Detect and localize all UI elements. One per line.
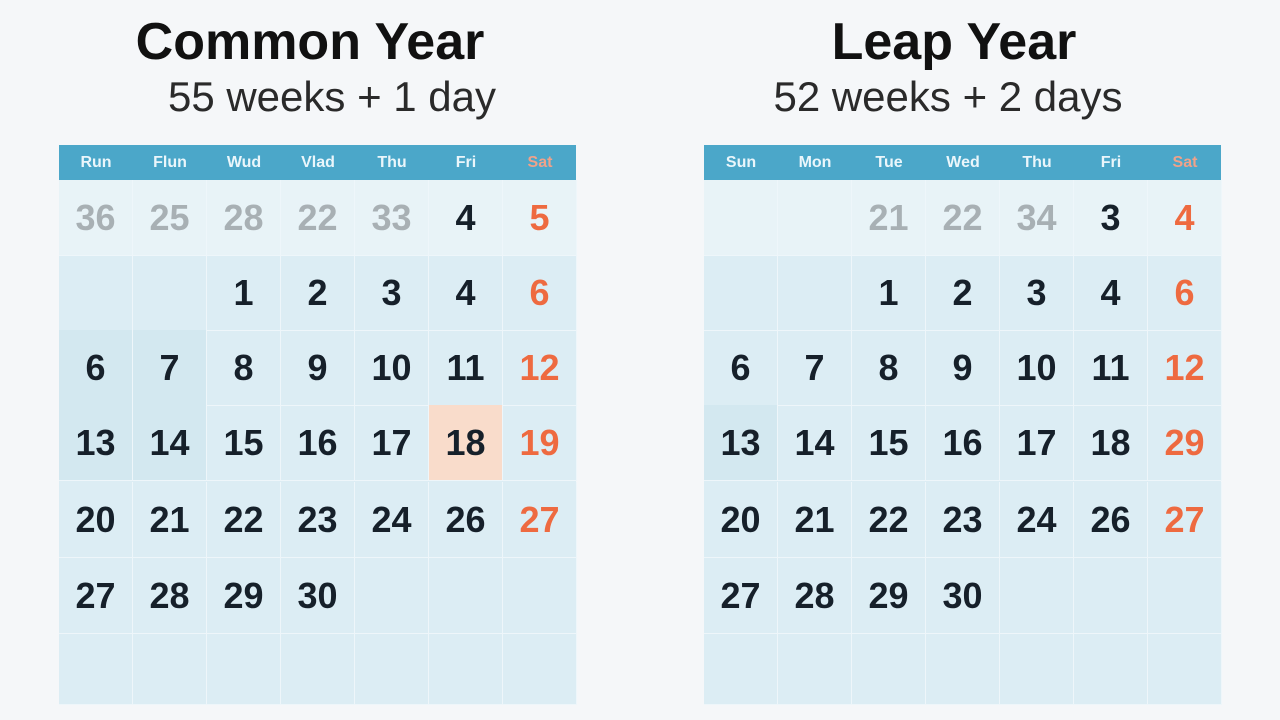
panel: common year calendar: 17 (371, 422, 412, 463)
panel: leap year calendar (704, 145, 1221, 705)
panel: common year calendar: 22 (297, 197, 338, 238)
panel: leap year calendar: 7 (804, 347, 825, 388)
panel: common year calendar: 5 (529, 197, 550, 238)
panel: leap year calendar: 22 (942, 197, 983, 238)
panel: common year calendar: 3 (381, 272, 402, 313)
panel: leap year calendar: 3 (1100, 197, 1121, 238)
panel: common year calendar (59, 145, 576, 705)
panel: common year calendar: 25 (149, 197, 190, 238)
panel: leap year calendar: 29 (1164, 422, 1205, 463)
panel: common year calendar: 7 (159, 347, 180, 388)
panel: leap year calendar: 24 (1016, 499, 1057, 540)
title: common year: Common Year (136, 13, 484, 71)
panel: leap year calendar: 3 (1026, 272, 1047, 313)
panel: common year calendar: 16 (297, 422, 338, 463)
panel: leap year calendar: 11 (1091, 347, 1130, 388)
panel: leap year calendar: 14 (794, 422, 835, 463)
panel: common year calendar: 13 (75, 422, 116, 463)
panel: leap year calendar: 1 (878, 272, 899, 313)
panel: common year calendar: 27 (75, 575, 116, 616)
panel: leap year calendar: 9 (952, 347, 973, 388)
panel: common year calendar: 18 (445, 422, 486, 463)
panel: common year calendar: 12 (519, 347, 560, 388)
panel: leap year calendar: 6 (1174, 272, 1195, 313)
panel: leap year calendar: 22 (868, 499, 909, 540)
panel: common year calendar: 8 (233, 347, 254, 388)
panel: leap year calendar: 21 (868, 197, 909, 238)
panel: common year calendar: 10 (371, 347, 412, 388)
panel: leap year calendar: 13 (720, 422, 761, 463)
panel: leap year calendar: Wed (946, 154, 980, 171)
panel: leap year calendar: 17 (1016, 422, 1057, 463)
panel: common year calendar: 27 (519, 499, 560, 540)
panel: leap year calendar: 15 (868, 422, 909, 463)
panel: common year calendar: 20 (75, 499, 116, 540)
panel: common year calendar: 2 (307, 272, 328, 313)
panel: common year calendar: 15 (223, 422, 264, 463)
panel: leap year calendar: 6 (730, 347, 751, 388)
panel: common year calendar: 24 (371, 499, 412, 540)
panel: leap year calendar: 18 (1090, 422, 1131, 463)
panel: common year calendar: 19 (519, 422, 560, 463)
panel: common year calendar: 1 (233, 272, 254, 313)
panel: leap year calendar: Fri (1101, 154, 1121, 171)
panel: common year calendar: 6 (85, 347, 106, 388)
panel: leap year calendar: 28 (794, 575, 835, 616)
panel: leap year calendar: Sun (726, 154, 756, 171)
panel: common year calendar: 9 (307, 347, 328, 388)
panel: leap year calendar: 2 (952, 272, 973, 313)
subtitle: leap year: 52 weeks + 2 days (773, 73, 1123, 120)
panel: leap year calendar: Mon (799, 154, 831, 171)
panel: leap year calendar: Tue (875, 154, 903, 171)
panel: common year calendar: Thu (377, 154, 407, 171)
panel: leap year calendar: 10 (1016, 347, 1057, 388)
panel: leap year calendar: 12 (1164, 347, 1205, 388)
panel: leap year calendar: 27 (1164, 499, 1205, 540)
panel: common year calendar: Run (80, 154, 112, 171)
panel: common year calendar: Vlad (301, 154, 335, 171)
subtitle: common year: 55 weeks + 1 day (168, 73, 496, 120)
panel: common year calendar: 4 (455, 197, 476, 238)
panel: common year calendar: 26 (445, 499, 486, 540)
panel: common year calendar: 33 (371, 197, 412, 238)
panel: leap year calendar: 34 (1016, 197, 1057, 238)
panel: common year calendar: 29 (223, 575, 264, 616)
title: leap year: Leap Year (832, 13, 1076, 71)
panel: leap year calendar: 29 (868, 575, 909, 616)
panel: common year calendar: 28 (149, 575, 190, 616)
panel: common year calendar: Wud (227, 154, 261, 171)
panel: leap year calendar: Thu (1022, 154, 1052, 171)
panel: leap year calendar: 8 (878, 347, 899, 388)
panel: common year calendar: 21 (149, 499, 190, 540)
panel: leap year calendar: 30 (942, 575, 983, 616)
panel: common year calendar: 30 (297, 575, 338, 616)
panel: leap year calendar: 26 (1090, 499, 1131, 540)
panel: common year calendar: 28 (223, 197, 264, 238)
panel: common year calendar: 14 (149, 422, 190, 463)
panel: leap year calendar: 27 (720, 575, 761, 616)
panel: leap year calendar: 4 (1174, 197, 1195, 238)
panel: common year calendar: 11 (446, 347, 485, 388)
panel: common year calendar: 6 (529, 272, 550, 313)
panel: common year calendar: Flun (153, 154, 187, 171)
panel: leap year calendar: 16 (942, 422, 983, 463)
panel: leap year calendar: 21 (794, 499, 835, 540)
panel: common year calendar: 4 (455, 272, 476, 313)
panel: common year calendar: 22 (223, 499, 264, 540)
panel: leap year calendar: 20 (720, 499, 761, 540)
panel: common year calendar: 36 (75, 197, 116, 238)
panel: leap year calendar: 23 (942, 499, 983, 540)
panel: leap year calendar: 4 (1100, 272, 1121, 313)
panel: common year calendar: 23 (297, 499, 338, 540)
panel: common year calendar: Sat (528, 154, 552, 171)
panel: leap year calendar: Sat (1173, 154, 1197, 171)
panel: common year calendar: Fri (456, 154, 476, 171)
